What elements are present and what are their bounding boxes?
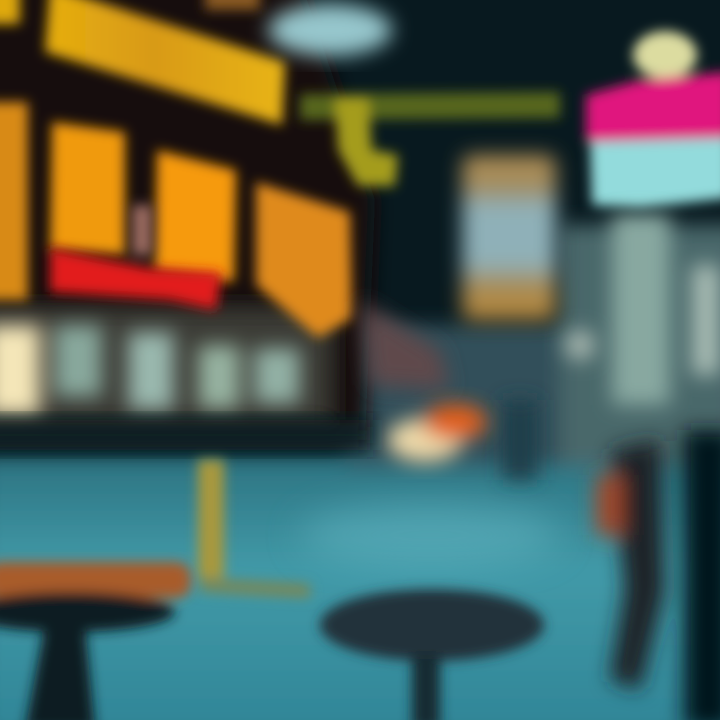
background: teal floor — [0, 225, 720, 720]
table: dark round table centre — [320, 589, 544, 720]
band: dark shop base — [0, 420, 370, 450]
column: tan and blue advertising pillar — [462, 155, 556, 320]
post: gold rope stand — [198, 460, 310, 598]
highlight: floor reflection — [300, 503, 560, 567]
awning: light blue lamp — [268, 4, 392, 56]
shopfront: dark backing — [0, 0, 375, 440]
panels: pale lower windows — [0, 325, 300, 415]
object: red and orange centre figure — [387, 404, 487, 462]
figures: dark people on the right — [596, 430, 720, 720]
crowd: mid-distance figures — [360, 300, 595, 480]
pole: pale pillar — [612, 215, 720, 405]
sign: yellow-green line and hook — [300, 92, 560, 186]
table: left table with orange top — [0, 562, 191, 720]
sign: magenta and cyan tower — [586, 31, 720, 208]
sign: yellow top banner — [0, 0, 285, 125]
panels: orange windows — [0, 102, 352, 338]
band: red strip — [50, 205, 222, 310]
